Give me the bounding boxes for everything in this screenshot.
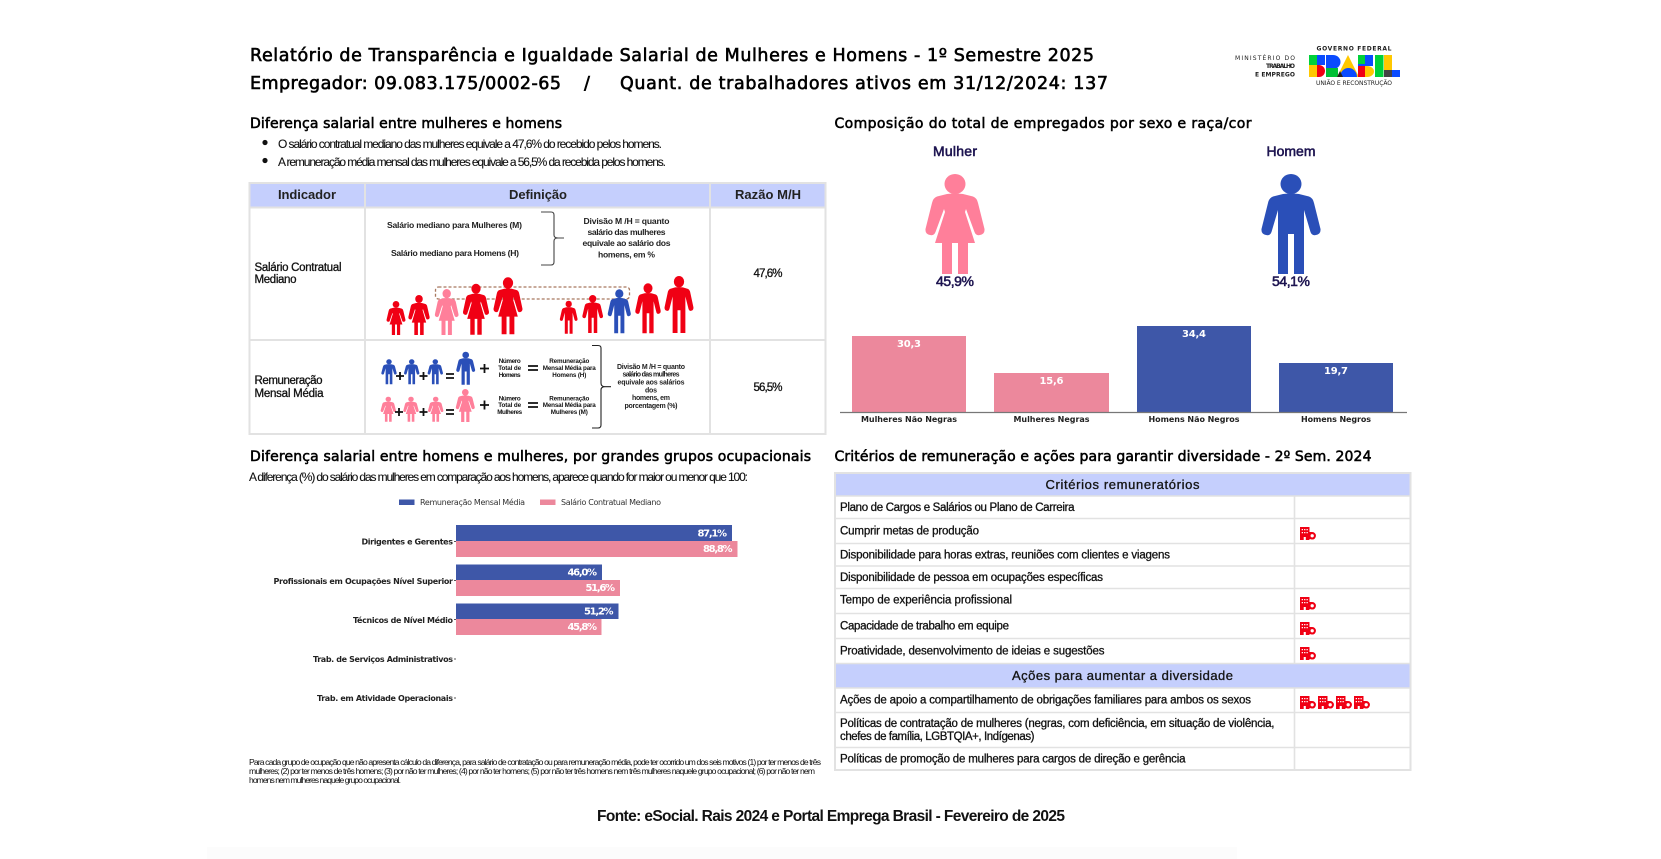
bar chart: occupational groups: [274, 525, 738, 703]
row: remuneração mensal média: [254, 346, 782, 428]
heading: grupos ocupacionais: Diferença salarial entre homens e mulheres, por grandes grupos ocupacionais: [250, 449, 811, 465]
group: profissionais: [274, 564, 620, 596]
bar: mulheres não negras: [852, 336, 966, 424]
group: técnicos: Técnicos de Nível Médio: [353, 615, 454, 625]
row: salário contratual mediano: Salário mediano para Homens (H): [391, 248, 519, 258]
formula: men: Homens: [499, 372, 521, 379]
logo: ministério e governo federal: [1235, 46, 1400, 87]
group: técnicos: [353, 604, 618, 635]
formula: women: Remuneração: [549, 396, 589, 402]
chart legend: [399, 497, 661, 507]
row: remuneração mensal média: Divisão M /H = quanto: [617, 364, 685, 371]
action rows: [840, 694, 1274, 766]
formula: men: Remuneração: [549, 358, 589, 365]
formula: men: Homens (H): [552, 372, 586, 379]
table header row: Indicador: [278, 187, 336, 202]
panel: man share: 54,1%: [1272, 273, 1310, 289]
formula: men: Total de: [498, 365, 522, 372]
group: dirigentes e gerentes: [362, 525, 738, 557]
group: profissionais: Profissionais em Ocupações Nível Superior: [274, 577, 453, 586]
group: técnicos: 45,8%: [568, 622, 597, 633]
summary bullets: O salário contratual mediano das mulheres equivale a 47,6% do recebido pelos homens.: [278, 137, 662, 151]
row: remuneração mensal média: equivale aos salários: [618, 380, 685, 386]
footnote: homens nem mulheres naquele grupo ocupacional.: [249, 775, 401, 785]
row: remuneração mensal média: Remuneração: [254, 375, 322, 387]
row: salário contratual mediano: Salário mediano para Mulheres (M): [387, 220, 522, 230]
row: salário contratual mediano: Salário Contratual: [254, 262, 342, 274]
action rows: Ações de apoio a compartilhamento de obrigações familiares para ambos os sexos: [840, 694, 1251, 706]
panel: man share: Homem: [1266, 143, 1316, 159]
row: remuneração mensal média: porcentagem (%): [624, 403, 678, 410]
row: remuneração mensal média: Mensal Média: [254, 388, 324, 400]
formula: men: Número: [499, 358, 521, 365]
formula: women: Mensal Média para: [543, 402, 596, 409]
footnote: [249, 757, 821, 785]
footnote: mulheres; (2) por ter menos de três homens; (3) por não ter mulheres; (4) por não ter homens; (5) por não ter três homens nem três mulheres naquele grupo ocupacional; (6) por não ter nem: [249, 766, 815, 776]
section header: critérios remuneratórios: Critérios remuneratórios: [1046, 477, 1200, 492]
title: [250, 46, 1108, 94]
heading: diferença salarial: Diferença salarial entre mulheres e homens: [250, 116, 562, 132]
section header: ações: Ações para aumentar a diversidade: [1012, 668, 1233, 683]
bar: homens negros: 19,7: [1324, 366, 1348, 377]
summary bullets: [262, 137, 666, 169]
criteria rows: Plano de Cargos e Salários ou Plano de Carreira: [840, 502, 1075, 514]
chart legend: Salário Contratual Mediano: [561, 498, 661, 507]
row: salário contratual mediano: homens, em %: [598, 250, 655, 260]
action rows: Políticas de promoção de mulheres para cargos de direção e gerência: [840, 754, 1186, 766]
criteria rows: Cumprir metas de produção: [840, 526, 979, 538]
title: Quant. de trabalhadores ativos em 31/12/2024: 137: [620, 74, 1108, 94]
logo: ministério e governo federal: UNIÃO E RECONSTRUÇÃO: [1316, 80, 1392, 87]
summary bullets: A remuneração média mensal das mulheres equivale a 56,5% da recebida pelos homens.: [278, 155, 666, 169]
row: salário contratual mediano: salário das mulheres: [588, 227, 666, 237]
bar: homens negros: [1279, 363, 1393, 424]
row: remuneração mensal média: salário das mulheres: [622, 372, 680, 378]
row: remuneração mensal média: homens, em: [632, 395, 670, 402]
group: dirigentes e gerentes: 88,8%: [703, 544, 732, 555]
bar: mulheres negras: 15,6: [1040, 376, 1064, 387]
criteria rows: Disponibilidade de pessoa em ocupações específicas: [840, 572, 1103, 584]
formula: women: Número: [499, 396, 521, 402]
source line: Fonte: eSocial. Rais 2024 e Portal Emprega Brasil - Fevereiro de 2025: [597, 808, 1065, 825]
section header: ações: [836, 664, 1410, 688]
row: salário contratual mediano: Mediano: [254, 274, 296, 286]
formula: women: Total de: [498, 402, 522, 409]
section header: critérios remuneratórios: [836, 474, 1410, 496]
panel: woman share: Mulher: [933, 143, 977, 159]
bar: homens não negros: [1137, 326, 1251, 424]
formula: men: [381, 352, 596, 385]
row: salário contratual mediano: equivale ao salário dos: [582, 238, 671, 248]
bar: mulheres não negras: 30,3: [897, 339, 921, 350]
bar: homens negros: Homens Negros: [1301, 415, 1371, 424]
row: salário contratual mediano: [254, 212, 782, 335]
panel: indicator table: [249, 183, 826, 434]
logo: ministério e governo federal: MINISTÉRIO DO: [1235, 54, 1295, 62]
group: atividade operacional: Trab. em Atividade Operacionais: [317, 694, 453, 703]
action rows: chefes de família, LGBTQIA+, Indígenas): [840, 731, 1035, 743]
bar: homens não negros: Homens Não Negros: [1148, 415, 1240, 424]
row: remuneração mensal média: 56,5%: [754, 382, 782, 394]
heading: composição: Composição do total de empregados por sexo e raça/cor: [834, 116, 1252, 132]
formula: women: [381, 389, 596, 422]
chart legend: Remuneração Mensal Média: [420, 497, 525, 507]
heading: critérios: Critérios de remuneração e ações para garantir diversidade - 2º Sem. 2024: [834, 449, 1372, 465]
logo: ministério e governo federal: TRABALHO: [1266, 63, 1295, 70]
panel: criteria table: [835, 473, 1411, 770]
group: profissionais: 46,0%: [568, 568, 597, 578]
row: remuneração mensal média: dos: [645, 388, 657, 394]
criteria rows: [840, 502, 1170, 658]
table header row: [250, 184, 824, 207]
logo: ministério e governo federal: E EMPREGO: [1255, 72, 1295, 78]
title: Empregador: 09.083.175/0002-65: [250, 74, 561, 94]
criteria rows: Tempo de experiência profissional: [840, 594, 1012, 606]
action rows: Políticas de contratação de mulheres (negras, com deficiência, em situação de violência,: [840, 718, 1274, 730]
bar: homens não negros: 34,4: [1182, 329, 1206, 340]
faint bottom band: [207, 847, 1237, 859]
bar chart: composition by sex and race: [840, 326, 1407, 424]
panel: woman share: [925, 143, 985, 289]
title: Relatório de Transparência e Igualdade Salarial de Mulheres e Homens - 1º Semestre 2025: [250, 46, 1094, 66]
group: profissionais: 51,6%: [586, 583, 615, 594]
criteria rows: Capacidade de trabalho em equipe: [840, 620, 1009, 632]
table header row: Razão M/H: [735, 187, 801, 202]
group: serviços administrativos: Trab. de Serviços Administrativos: [313, 655, 453, 664]
formula: women: Mulheres: [497, 409, 523, 416]
title: /: [584, 74, 590, 94]
panel: man share: [1261, 143, 1321, 289]
logo: ministério e governo federal: GOVERNO FEDERAL: [1316, 46, 1392, 52]
formula: men: Mensal Média para: [543, 365, 596, 372]
bar: mulheres negras: [994, 373, 1109, 424]
bar: mulheres negras: Mulheres Negras: [1014, 415, 1090, 424]
criteria rows: Proatividade, desenvolvimento de ideias e sugestões: [840, 646, 1105, 658]
group: dirigentes e gerentes: 87,1%: [698, 528, 727, 540]
formula: women: Mulheres (M): [551, 409, 588, 416]
chart description: A diferença (%) do salário das mulheres em comparação aos homens, aparece quando for maior ou menor que 100:: [249, 470, 748, 484]
median illustration: women and men figures: [387, 276, 693, 335]
footnote: Para cada grupo de ocupação que não apresenta cálculo da diferença, para salário de contratação ou para remuneração média, pode ter ocorrido um dos seis motivos (1) por ter menos de três: [249, 757, 821, 767]
group: técnicos: 51,2%: [584, 606, 614, 618]
row: salário contratual mediano: 47,6%: [754, 268, 782, 280]
group: dirigentes e gerentes: Dirigentes e Gerentes: [362, 538, 453, 546]
building icons: [1300, 527, 1369, 709]
row: salário contratual mediano: Divisão M /H = quanto: [584, 216, 670, 226]
criteria rows: Disponibilidade para horas extras, reuniões com clientes e viagens: [840, 550, 1170, 562]
panel: woman share: 45,9%: [936, 273, 974, 289]
bar: mulheres não negras: Mulheres Não Negras: [861, 415, 957, 424]
table header row: Definição: [509, 187, 567, 202]
